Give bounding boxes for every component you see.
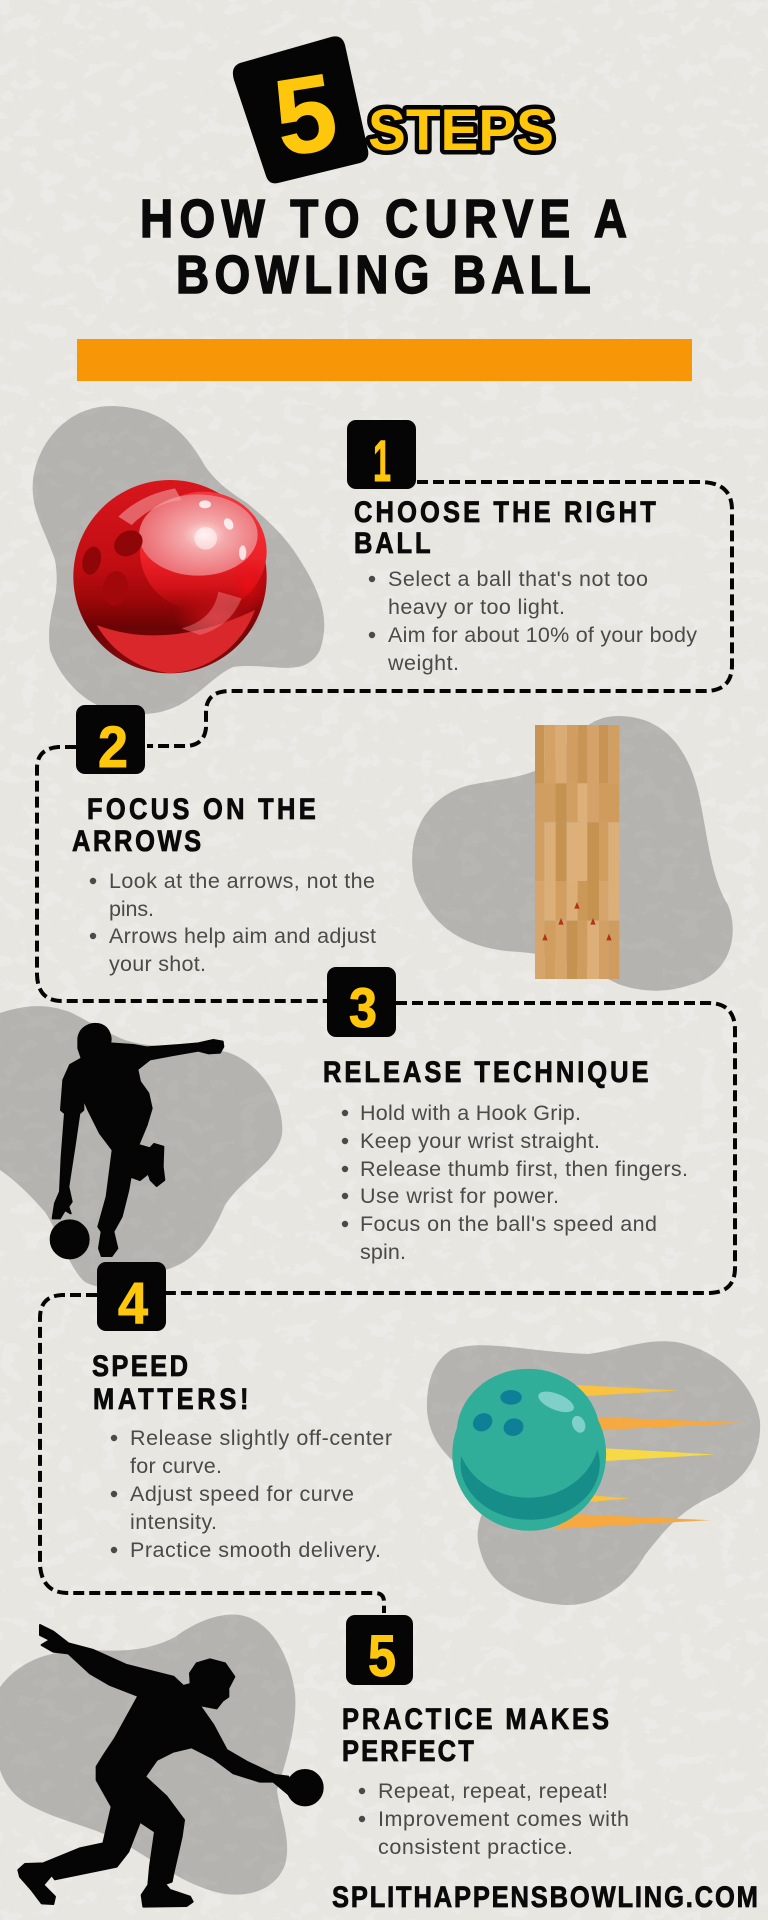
text block: step 1 bullets (369, 567, 697, 675)
text block: step 4 bullets: Release slightly off-center (130, 1426, 392, 1450)
text block: step 3 bullets: Release thumb first, then fingers. (360, 1157, 688, 1181)
title (140, 189, 627, 305)
heading: practice makes perfect: PRACTICE MAKES (342, 1702, 609, 1735)
blob: step 4 (427, 1341, 760, 1605)
badge: 4 (97, 1262, 166, 1336)
icon: bowler silhouette in follow-through (18, 1625, 323, 1907)
heading: practice makes perfect (342, 1702, 609, 1767)
icon: red bowling ball (73, 480, 267, 673)
badge: 4: 4 (118, 1271, 148, 1336)
title: BOWLING BALL (176, 245, 591, 305)
text block: step 3 bullets: Use wrist for power. (360, 1184, 559, 1208)
text block: step 1 bullets: Aim for about 10% of your body (388, 623, 697, 647)
header word: STEPS: STEPS (368, 98, 554, 163)
badge: 2: 2 (98, 715, 128, 780)
heading: focus on the arrows (72, 792, 316, 857)
heading: practice makes perfect: PERFECT (342, 1734, 474, 1767)
text block: step 3 bullets (342, 1101, 688, 1264)
blob: step 2 (412, 716, 733, 991)
text block: step 1 bullets: heavy or too light. (388, 595, 565, 619)
header badge: 5: 5 (266, 50, 344, 179)
header badge: 5 (233, 36, 368, 183)
text block: step 4 bullets (111, 1426, 392, 1562)
badge: 1: 1 (373, 429, 391, 494)
text block: step 3 bullets: Focus on the ball's speed and (360, 1212, 657, 1236)
heading: focus on the arrows: ARROWS (72, 824, 201, 857)
panel: step 1 choose the right ball (33, 406, 697, 714)
heading: speed matters: MATTERS! (93, 1382, 249, 1415)
text block: step 2 bullets: Arrows help aim and adjust (109, 924, 376, 948)
text block: step 2 bullets (90, 869, 376, 976)
panel: step 4 speed matters (92, 1262, 760, 1605)
heading: speed matters (92, 1349, 249, 1415)
title: HOW TO CURVE A (140, 189, 627, 249)
heading: choose the right ball: BALL (354, 526, 431, 559)
icon: teal bowling ball with flames (452, 1369, 750, 1531)
panel: step 3 release technique (0, 967, 688, 1288)
badge: 2 (76, 705, 145, 780)
text block: step 1 bullets: weight. (387, 651, 459, 675)
text block: step 1 bullets: Select a ball that's not too (388, 567, 648, 591)
panel: step 5 practice makes perfect (0, 1614, 629, 1907)
text block: step 4 bullets: for curve. (130, 1454, 222, 1478)
badge: 3 (327, 967, 396, 1039)
website footer: SPLITHAPPENSBOWLING.COM (332, 1880, 758, 1913)
badge: 1 (347, 420, 416, 494)
icon: lane arrows (542, 902, 612, 940)
text block: step 4 bullets: Practice smooth delivery. (130, 1538, 381, 1562)
heading: choose the right ball (354, 495, 656, 559)
badge: 5: 5 (368, 1624, 396, 1689)
text block: step 2 bullets: pins. (109, 897, 154, 921)
text block: step 3 bullets: spin. (360, 1240, 406, 1264)
text block: step 4 bullets: Adjust speed for curve (130, 1482, 354, 1506)
blob: step 3 (0, 1006, 282, 1288)
heading: focus on the arrows: FOCUS ON THE (87, 792, 316, 825)
text block: step 2 bullets: your shot. (109, 952, 206, 976)
dashed connector path (37, 482, 735, 1613)
badge: 5 (346, 1615, 413, 1689)
heading: choose the right ball: CHOOSE THE RIGHT (354, 495, 656, 528)
heading: release technique: RELEASE TECHNIQUE (323, 1055, 649, 1088)
icon: bowler silhouette releasing ball (51, 1024, 223, 1258)
text block: step 5 bullets: Improvement comes with (378, 1807, 629, 1831)
blob: step 1 (33, 406, 324, 714)
text block: step 3 bullets: Hold with a Hook Grip. (360, 1101, 581, 1125)
text block: step 5 bullets: Repeat, repeat, repeat! (378, 1779, 608, 1803)
text block: step 4 bullets: intensity. (130, 1510, 217, 1534)
orange bar (77, 339, 692, 381)
text block: step 5 bullets: consistent practice. (378, 1835, 573, 1859)
text block: step 2 bullets: Look at the arrows, not the (109, 869, 375, 893)
icon: bowling lane (535, 725, 619, 979)
panel: step 2 focus on the arrows (72, 705, 733, 991)
text block: step 5 bullets (359, 1779, 629, 1859)
badge: 3: 3 (349, 976, 377, 1039)
heading: speed matters: SPEED (92, 1349, 188, 1382)
text block: step 3 bullets: Keep your wrist straight. (360, 1129, 600, 1153)
blob: step 5 (0, 1614, 295, 1895)
